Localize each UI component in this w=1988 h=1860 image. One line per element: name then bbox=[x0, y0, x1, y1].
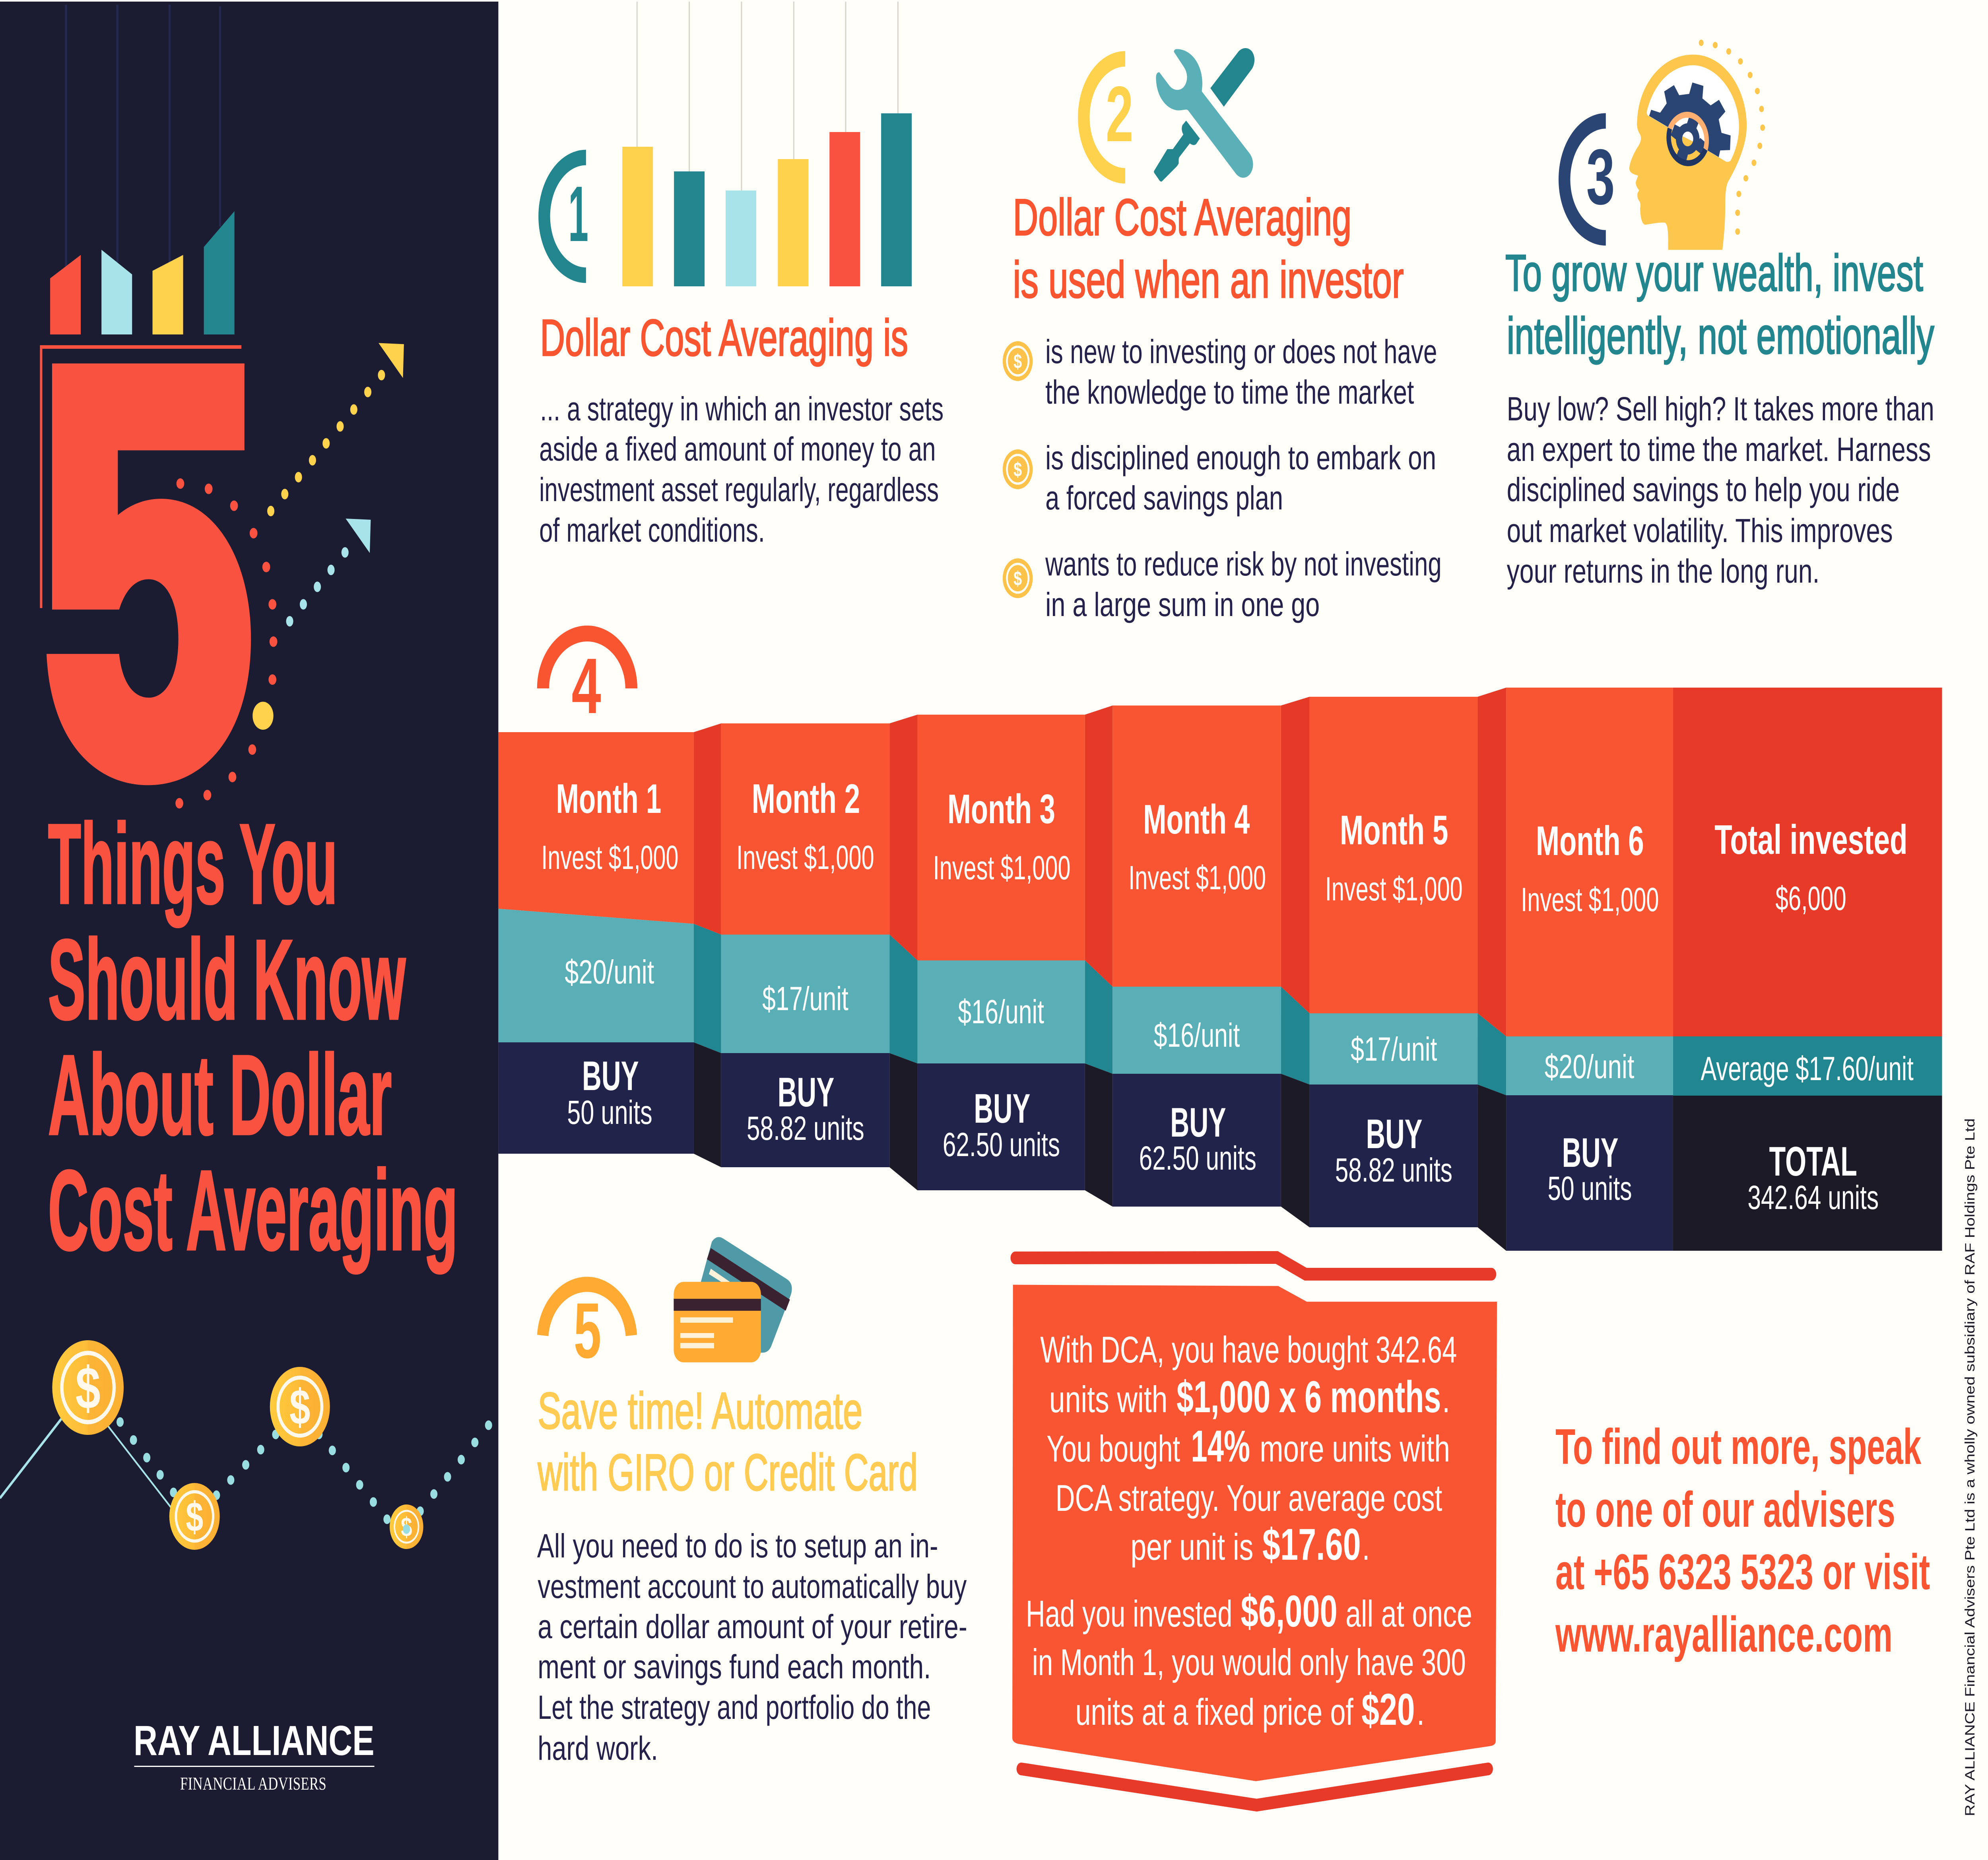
column: month 2: Month 2 bbox=[752, 775, 860, 822]
column: month 6: Invest $1,000 bbox=[1521, 881, 1659, 918]
logo: Ray Alliance bbox=[134, 1717, 375, 1794]
column: month 1: Invest $1,000 bbox=[541, 839, 678, 876]
hanging lines above mini bars bbox=[66, 5, 220, 266]
body text 1 bbox=[539, 390, 944, 549]
callout text: $1,000 x 6 months bbox=[1176, 1372, 1441, 1422]
body text 3: your returns in the long run. bbox=[1507, 552, 1819, 590]
column: month 1: BUY bbox=[582, 1053, 639, 1099]
call to action: To find out more, speak bbox=[1555, 1419, 1922, 1475]
body text 5 bbox=[537, 1527, 967, 1767]
icon: wrench and screwdriver bbox=[1154, 48, 1254, 182]
vertical disclaimer: RAY ALLIANCE Financial Advisers Pte Ltd is a wholly owned subsidiary of RAF Holdings Pte Ltd bbox=[1962, 1118, 1978, 1816]
title: Things You bbox=[48, 801, 338, 927]
callout text: $17.60 bbox=[1262, 1520, 1361, 1570]
column: month 1 bbox=[498, 723, 721, 1167]
coin line chart bbox=[0, 1340, 492, 1550]
body text 1: investment asset regularly, regardless bbox=[539, 471, 939, 508]
section 1: what DCA is bbox=[539, 2, 944, 549]
column: month 3: $16/unit bbox=[958, 993, 1044, 1030]
column: total bbox=[1673, 688, 1942, 1251]
icon: large coin bbox=[52, 1340, 124, 1435]
column: month 4: Month 4 bbox=[1143, 796, 1250, 843]
logo: Ray Alliance: FINANCIAL ADVISERS bbox=[180, 1773, 326, 1794]
column: month 2: 58.82 units bbox=[747, 1110, 864, 1147]
call to action: www.rayalliance.com bbox=[1555, 1606, 1893, 1662]
heading 5: with GIRO or Credit Card bbox=[538, 1444, 918, 1501]
heading 3: intelligently, not emotionally bbox=[1507, 307, 1934, 365]
column: month 4 bbox=[1112, 697, 1310, 1227]
column: month 6: 50 units bbox=[1547, 1170, 1632, 1207]
body text 5: a certain dollar amount of your retire- bbox=[538, 1608, 967, 1645]
icon: head with gears bbox=[1629, 40, 1765, 250]
callout text: all at once bbox=[1345, 1593, 1472, 1635]
bullet: disciplined: a forced savings plan bbox=[1045, 479, 1283, 517]
body text 1: of market conditions. bbox=[539, 511, 765, 549]
callout text: . bbox=[1442, 1378, 1450, 1420]
mini bar chart icon bbox=[50, 211, 235, 334]
column: total: Average $17.60/unit bbox=[1701, 1050, 1914, 1087]
callout text: per unit is bbox=[1131, 1526, 1253, 1568]
heading 2: Dollar Cost Averaging bbox=[1013, 189, 1351, 246]
column: month 4: $16/unit bbox=[1154, 1016, 1240, 1054]
section 5: automate bbox=[537, 1237, 967, 1767]
column: month 3 bbox=[917, 706, 1112, 1207]
body text 5: hard work. bbox=[538, 1730, 658, 1767]
column: month 5: Invest $1,000 bbox=[1325, 870, 1463, 908]
bullet: reduce risk bbox=[1003, 545, 1442, 623]
body text 3: Buy low? Sell high? It takes more than bbox=[1507, 390, 1934, 428]
big numeral 5 bbox=[40, 345, 251, 785]
dotted arc and arrows bbox=[175, 343, 404, 809]
badge: number 5: 5 bbox=[574, 1287, 601, 1375]
heading 2: is used when an investor bbox=[1013, 251, 1404, 309]
callout text: 14% bbox=[1191, 1422, 1250, 1471]
body text 5: All you need to do is to setup an in- bbox=[537, 1527, 938, 1565]
column: month 2 bbox=[721, 715, 917, 1190]
column: month 6 bbox=[1506, 688, 1673, 1251]
callout text: units at a fixed price of bbox=[1076, 1691, 1354, 1733]
bullet: disciplined: is disciplined enough to embark on bbox=[1045, 439, 1436, 476]
panel: left title column bbox=[0, 2, 498, 1860]
column: month 3: 62.50 units bbox=[943, 1126, 1060, 1163]
column: total: $6,000 bbox=[1775, 880, 1846, 917]
callout text: units with bbox=[1049, 1378, 1167, 1420]
bullet: disciplined: $ bbox=[1013, 459, 1022, 481]
body text 1: ... a strategy in which an investor sets bbox=[540, 390, 944, 428]
heading 2 bbox=[1013, 189, 1404, 309]
body text 3: disciplined savings to help you ride bbox=[1507, 471, 1900, 508]
column: month 6: Month 6 bbox=[1536, 818, 1644, 864]
icon: smallest coin: $ bbox=[401, 1512, 412, 1542]
callout text: Had you invested bbox=[1026, 1593, 1233, 1635]
bullet: new to investing: is new to investing or does not have bbox=[1045, 333, 1437, 370]
call to action bbox=[1555, 1419, 1930, 1662]
icon: small coin bbox=[169, 1483, 220, 1550]
column: month 1: Month 1 bbox=[556, 775, 661, 822]
column: month 3: Invest $1,000 bbox=[933, 849, 1071, 886]
heading 1: Dollar Cost Averaging is bbox=[540, 309, 908, 367]
callout text: DCA strategy. Your average cost bbox=[1056, 1477, 1442, 1519]
callout text: $20 bbox=[1361, 1685, 1415, 1735]
column: total: Total invested bbox=[1714, 816, 1908, 863]
badge: number 5 bbox=[543, 1284, 631, 1375]
badge: number 4: 4 bbox=[572, 642, 601, 730]
logo: Ray Alliance: RAY ALLIANCE bbox=[134, 1717, 375, 1764]
callout text: With DCA, you have bought 342.64 bbox=[1040, 1329, 1457, 1370]
chart: stepped DCA table bbox=[498, 688, 1942, 1251]
callout text: $6,000 bbox=[1241, 1587, 1338, 1636]
title bbox=[48, 801, 458, 1274]
column: month 5: $17/unit bbox=[1351, 1030, 1437, 1068]
column: month 2: Invest $1,000 bbox=[736, 839, 874, 876]
callout text: . bbox=[1362, 1526, 1370, 1568]
column: month 1: 50 units bbox=[567, 1094, 652, 1131]
icon: large coin: $ bbox=[76, 1355, 101, 1422]
column: month 4: BUY bbox=[1170, 1099, 1226, 1146]
icon: credit cards bbox=[674, 1237, 792, 1362]
column: month 5: BUY bbox=[1366, 1111, 1422, 1157]
badge: number 3: 3 bbox=[1586, 133, 1615, 221]
bullet: reduce risk: wants to reduce risk by not investing bbox=[1045, 545, 1442, 583]
column: month 3: Month 3 bbox=[947, 786, 1055, 832]
bullet: new to investing: $ bbox=[1013, 351, 1022, 373]
body text 1: aside a fixed amount of money to an bbox=[539, 430, 936, 468]
title: Should Know bbox=[48, 916, 406, 1043]
column: total: TOTAL bbox=[1769, 1138, 1857, 1185]
column: month 6: BUY bbox=[1562, 1129, 1619, 1176]
column: month 5: 58.82 units bbox=[1335, 1151, 1452, 1189]
badge: number 2: 2 bbox=[1106, 70, 1133, 158]
bullet: reduce risk: in a large sum in one go bbox=[1045, 586, 1320, 623]
column: month 2: $17/unit bbox=[762, 980, 848, 1017]
body text 5: vestment account to automatically buy bbox=[538, 1568, 967, 1605]
body text 5: ment or savings fund each month. bbox=[538, 1648, 931, 1685]
bullet: disciplined bbox=[1003, 439, 1436, 517]
callout text bbox=[1026, 1329, 1472, 1735]
callout text: . bbox=[1417, 1691, 1425, 1733]
heading 5 bbox=[538, 1382, 918, 1501]
column: month 5: Month 5 bbox=[1340, 807, 1448, 853]
icon: medium coin: $ bbox=[289, 1380, 311, 1435]
icon: smallest coin bbox=[390, 1504, 423, 1549]
title: About Dollar bbox=[48, 1032, 392, 1158]
body text 3: an expert to time the market. Harness bbox=[1507, 431, 1931, 468]
call to action: at +65 6323 5323 or visit bbox=[1555, 1544, 1930, 1600]
bullet: reduce risk: $ bbox=[1013, 568, 1022, 590]
column: month 1: $20/unit bbox=[565, 953, 654, 991]
heading 3 bbox=[1505, 245, 1934, 365]
column: month 3: BUY bbox=[974, 1085, 1030, 1132]
section 2: when DCA is used bbox=[1003, 48, 1442, 623]
callout text: You bought bbox=[1046, 1428, 1180, 1469]
column: month 2: BUY bbox=[778, 1069, 834, 1116]
badge: number 4 bbox=[543, 634, 631, 730]
column: month 4: Invest $1,000 bbox=[1128, 859, 1266, 896]
column: month 5 bbox=[1310, 688, 1506, 1251]
heading 3: To grow your wealth, invest bbox=[1505, 245, 1923, 302]
icon: medium coin bbox=[270, 1367, 330, 1446]
title: Cost Averaging bbox=[48, 1147, 458, 1274]
callout text: in Month 1, you would only have 300 bbox=[1032, 1641, 1466, 1683]
callout text: more units with bbox=[1260, 1428, 1450, 1469]
badge: number 3 bbox=[1565, 121, 1615, 238]
section 3: invest intelligently bbox=[1505, 40, 1934, 590]
bar chart icon with hanging strings bbox=[622, 2, 912, 286]
heading 5: Save time! Automate bbox=[538, 1382, 862, 1440]
call to action: to one of our advisers bbox=[1555, 1481, 1895, 1537]
body text 3: out market volatility. This improves bbox=[1507, 512, 1893, 549]
column: month 4: 62.50 units bbox=[1139, 1139, 1256, 1177]
column: month 6: $20/unit bbox=[1545, 1048, 1635, 1085]
badge: number 2 bbox=[1084, 59, 1133, 176]
bullet: new to investing bbox=[1003, 333, 1437, 411]
badge: number 1 bbox=[544, 157, 588, 275]
badge: number 1: 1 bbox=[568, 170, 588, 258]
body text 5: Let the strategy and portfolio do the bbox=[538, 1689, 931, 1726]
column: total: 342.64 units bbox=[1747, 1179, 1879, 1216]
body text 3 bbox=[1507, 390, 1934, 590]
bullet: new to investing: the knowledge to time the market bbox=[1045, 373, 1414, 411]
icon: small coin: $ bbox=[186, 1493, 203, 1540]
callout: DCA result banner bbox=[1012, 1257, 1497, 1805]
